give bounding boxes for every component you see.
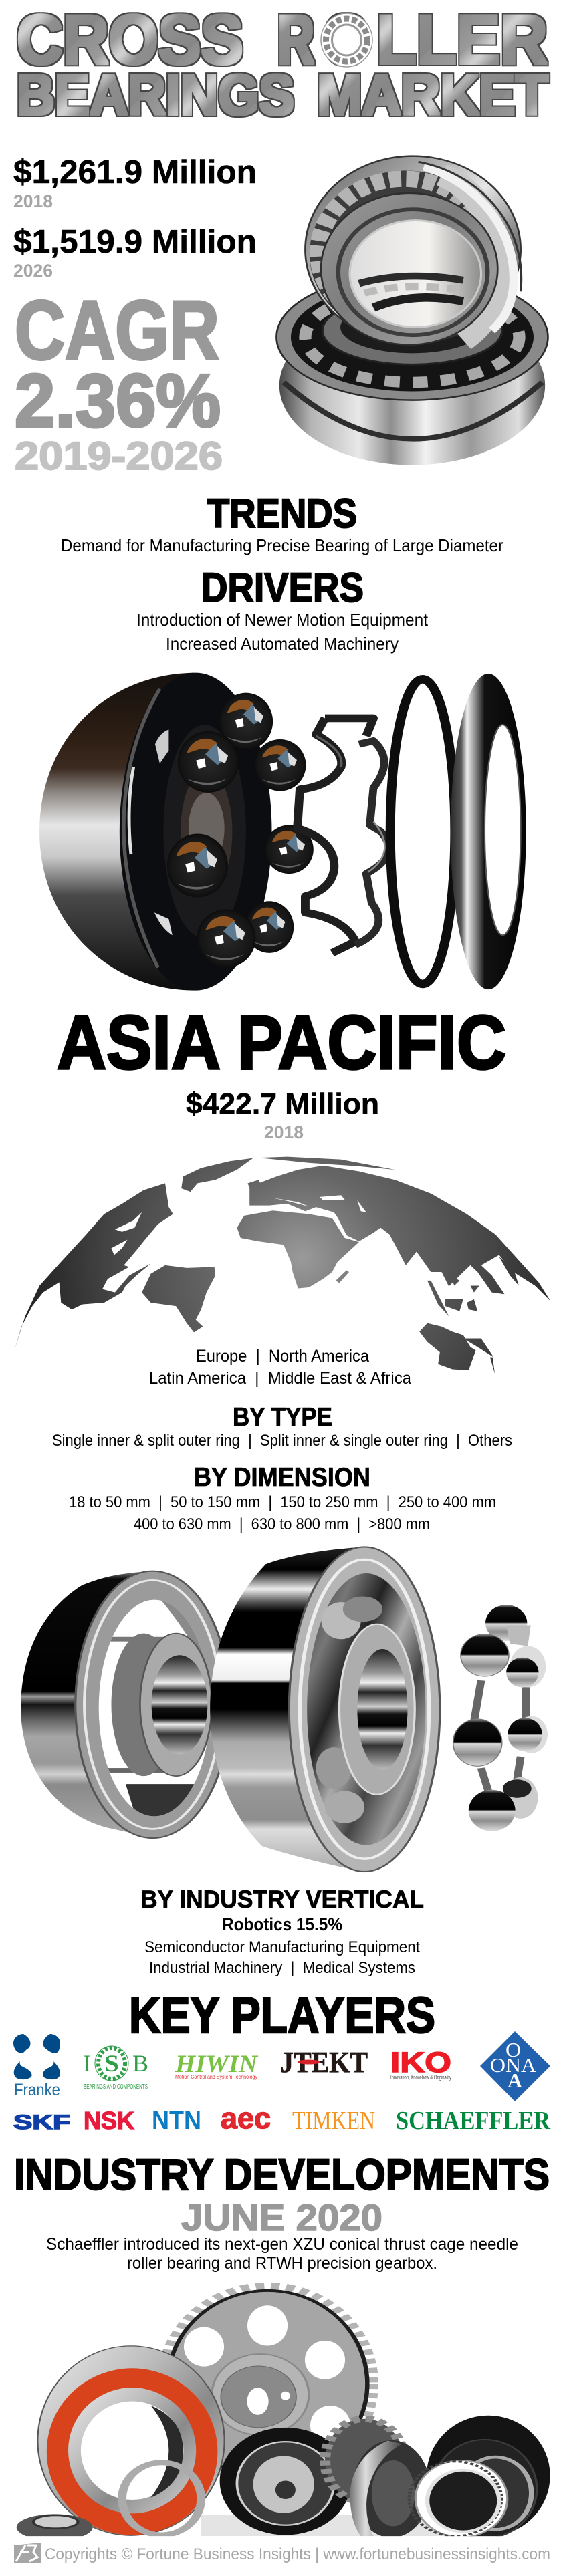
title line: cross roller: CROSS [17, 1, 243, 79]
logo: IKO: Innovation, Know-how & Originality [390, 2074, 451, 2081]
logo: ISB [83, 2046, 148, 2091]
drivers text: Introduction of Newer Motion Equipment [136, 610, 429, 630]
vertical list [144, 1938, 420, 1977]
development text: Schaeffler introduced its next-gen XZU conical thrust cage needle [46, 2235, 518, 2254]
logo: Timken: TIMKEN [292, 2107, 375, 2135]
illustration: stacked spherical roller bearings [276, 156, 548, 465]
heading: trends: TRENDS [207, 491, 357, 536]
title line: bearings market [17, 63, 548, 127]
right black bearing [427, 2416, 550, 2538]
other regions [149, 1347, 411, 1388]
CAGR period: 2019-2026 [15, 434, 223, 478]
vertical list: Semiconductor Manufacturing Equipment [144, 1938, 420, 1956]
logo: ONA [480, 2031, 550, 2101]
region value: $422.7 Million [186, 1087, 379, 1120]
world map [14, 1157, 550, 1374]
development text: roller bearing and RTWH precision gearbox. [127, 2254, 437, 2273]
illustration: chrome bearing parts [21, 1547, 548, 1872]
logo: ISB: BEARINGS AND COMPONENTS [84, 2083, 148, 2091]
logo: ISB: S [104, 2050, 119, 2077]
tapered roller bearing [409, 2460, 508, 2537]
icon: Fortune Business Insights logo [14, 2543, 41, 2563]
region year: 2018 [264, 1122, 304, 1142]
development text [46, 2235, 518, 2273]
vertical list: Industrial Machinery | Medical Systems [149, 1959, 415, 1977]
drivers text [136, 610, 429, 654]
other regions: Latin America | Middle East & Africa [149, 1369, 411, 1388]
heading: by industry vertical: BY INDUSTRY VERTICAL [140, 1886, 424, 1913]
logo: Franke: Franke [14, 2081, 60, 2099]
logo: aec: aec [221, 2102, 271, 2135]
logo: JTEKT: JTEKT [280, 2046, 368, 2079]
market size stats [13, 154, 257, 478]
logo: Franke [13, 2034, 60, 2099]
title line: cross roller: R [277, 1, 314, 79]
type list: Single inner & split outer ring | Split inner & single outer ring | Others [52, 1432, 512, 1450]
illustration: gears and bearings [17, 2286, 550, 2541]
left ring [21, 1571, 230, 1838]
logo: Schaeffler: SCHAEFFLER [396, 2107, 550, 2135]
trends text: Demand for Manufacturing Precise Bearing of Large Diameter [61, 535, 503, 555]
logo: ONA: ONA [490, 2053, 537, 2077]
illustration: exploded black ball bearing [39, 673, 526, 991]
logo: SKF: SKF [13, 2111, 70, 2134]
logo: HIWIN: Motion Control and System Technology [175, 2074, 257, 2080]
other regions: Europe | North America [196, 1347, 369, 1366]
small tapered bearing [16, 2514, 92, 2536]
red sealed bearing [37, 2346, 225, 2535]
title line: cross roller: O [324, 1, 369, 79]
title line: bearings market: BEARINGS [17, 63, 294, 127]
large gear [162, 2286, 372, 2481]
title [17, 1, 548, 127]
heading: key players: KEY PLAYERS [129, 1987, 435, 2044]
logo: ISB: B [132, 2050, 148, 2077]
drivers text: Increased Automated Machinery [166, 634, 399, 654]
logo: NTN: NTN [152, 2107, 201, 2135]
value 2018: $1,261.9 Million [13, 154, 257, 190]
small gear [325, 2419, 404, 2502]
title line: cross roller [17, 1, 548, 79]
value 2026: $1,519.9 Million [13, 224, 257, 260]
logo: IKO: IKO [390, 2047, 451, 2079]
ball cage [453, 1605, 548, 1831]
development date: JUNE 2020 [181, 2196, 382, 2238]
year 2026: 2026 [13, 261, 53, 281]
middle ring [210, 1547, 440, 1872]
logo: ONA: A [508, 2069, 523, 2092]
dimension list: 400 to 630 mm | 630 to 800 mm | >800 mm [134, 1515, 430, 1533]
CAGR label: CAGR [15, 285, 219, 377]
title line: bearings market: MARKET [317, 63, 548, 127]
logo: ONA: O [505, 2038, 521, 2061]
logo: ISB: I [83, 2050, 91, 2077]
steel cone ring [350, 2440, 430, 2537]
black seal [220, 2428, 351, 2535]
dimension list [69, 1493, 496, 1533]
heading: drivers: DRIVERS [201, 565, 364, 610]
CAGR value: 2.36% [15, 359, 221, 442]
footer [14, 2543, 550, 2563]
logo: HIWIN: HIWIN [175, 2051, 258, 2078]
logo: NSK: NSK [84, 2107, 134, 2134]
heading: by dimension: BY DIMENSION [194, 1463, 370, 1492]
heading: by type: BY TYPE [233, 1403, 332, 1432]
heading: asia pacific: ASIA PACIFIC [57, 1001, 506, 1085]
icon: ball bearing as letter O [321, 13, 372, 67]
leading segment: Robotics 15.5% [222, 1914, 342, 1934]
title line: cross roller: LLER [376, 1, 548, 79]
year 2018: 2018 [13, 191, 53, 211]
dimension list: 18 to 50 mm | 50 to 150 mm | 150 to 250 mm | 250 to 400 mm [69, 1493, 496, 1511]
